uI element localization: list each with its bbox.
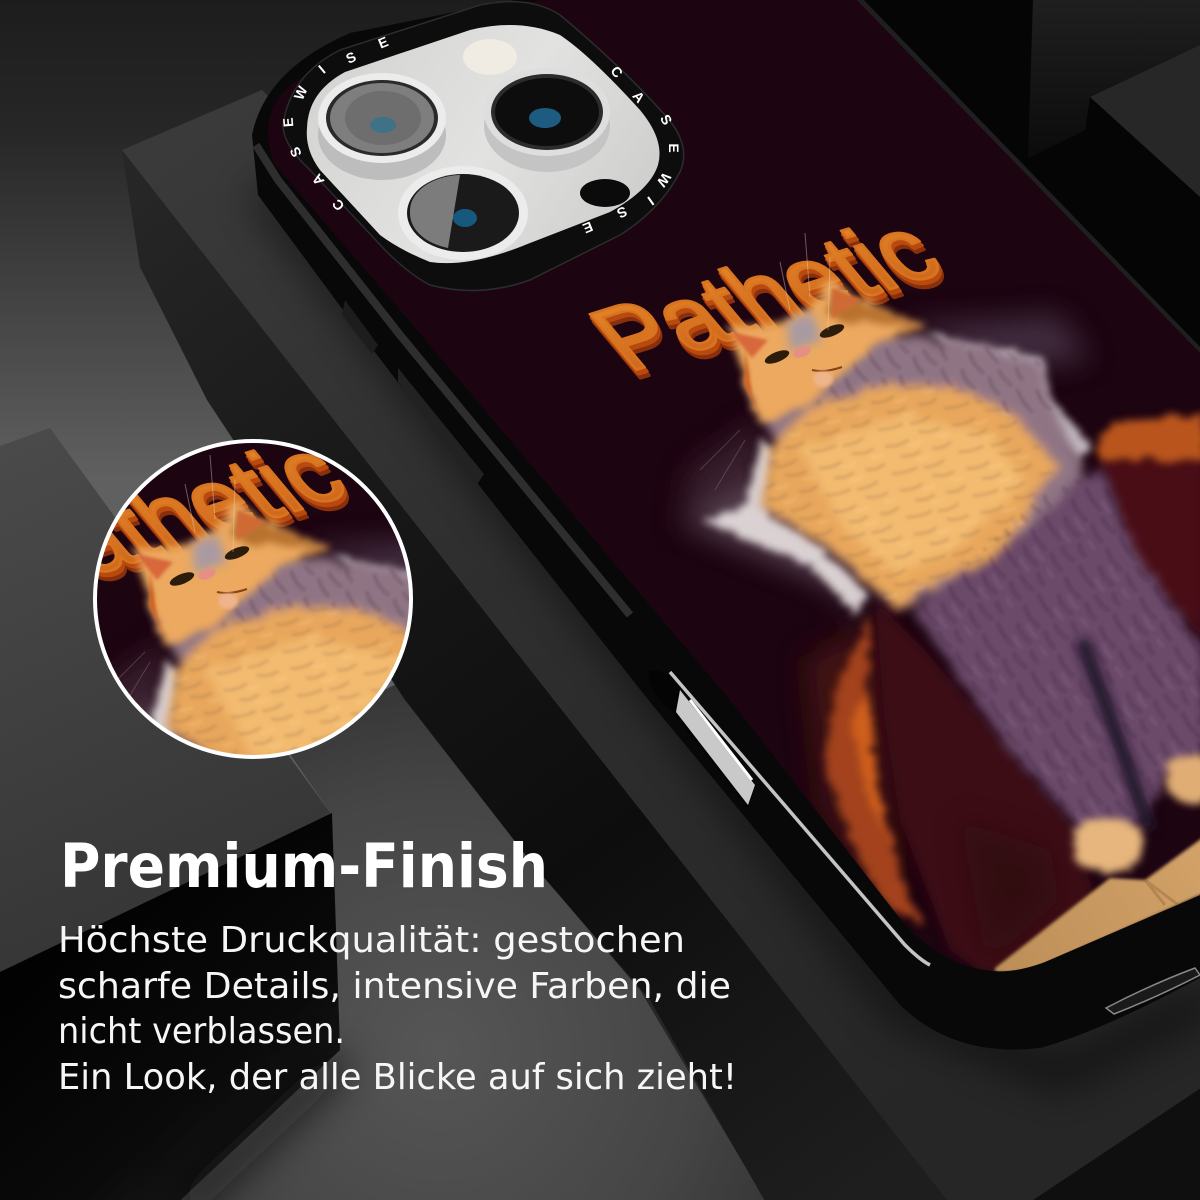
body text: Ein Look, der alle Blicke auf sich zieht! [58, 1057, 737, 1098]
brand ring left: S [343, 48, 359, 67]
artwork title: Pathetic [570, 202, 964, 393]
phone case body [252, 0, 1200, 1050]
mic hole [580, 179, 630, 207]
brand ring left: I [315, 62, 328, 77]
brand ring left: S [286, 144, 305, 160]
phone back artwork [260, 0, 1200, 990]
brand ring right: W [653, 170, 674, 191]
brand ring left: C [329, 196, 347, 214]
brand ring right: E [666, 143, 682, 153]
brand ring left [280, 33, 390, 214]
brand ring right: S [614, 203, 630, 222]
lens 2 [484, 68, 610, 172]
brand ring right: E [581, 218, 595, 237]
brand ring left: E [280, 117, 296, 128]
body text [58, 920, 737, 1098]
brand ring left: A [308, 171, 327, 189]
charging port [1106, 968, 1200, 1014]
heading: Premium-Finish [60, 831, 548, 902]
frame highlight [670, 672, 930, 965]
artwork title: Pathetic [572, 206, 966, 397]
side buttons [342, 300, 756, 808]
flash [463, 39, 517, 75]
body text: scharfe Details, intensive Farben, die [58, 966, 731, 1007]
lens 1 [318, 73, 446, 180]
brand ring right: A [629, 88, 648, 106]
brand ring right: S [657, 111, 676, 128]
lit face below platform [170, 680, 765, 1200]
brand ring right: I [645, 193, 657, 209]
artwork title: Pathetic [568, 198, 962, 389]
brand ring left: E [376, 33, 390, 52]
cat painting [680, 233, 1200, 975]
body text: nicht verblassen. [58, 1011, 345, 1052]
brand ring left: W [290, 83, 311, 102]
camera bump [280, 2, 684, 290]
brand ring right [581, 63, 682, 237]
camera glass [307, 25, 660, 263]
lens 3 [398, 166, 528, 260]
brand ring right: C [607, 63, 626, 81]
lower-left block [0, 428, 340, 1200]
detail zoom circle [93, 439, 413, 759]
body text: Höchste Druckqualität: gestochen [58, 920, 685, 961]
